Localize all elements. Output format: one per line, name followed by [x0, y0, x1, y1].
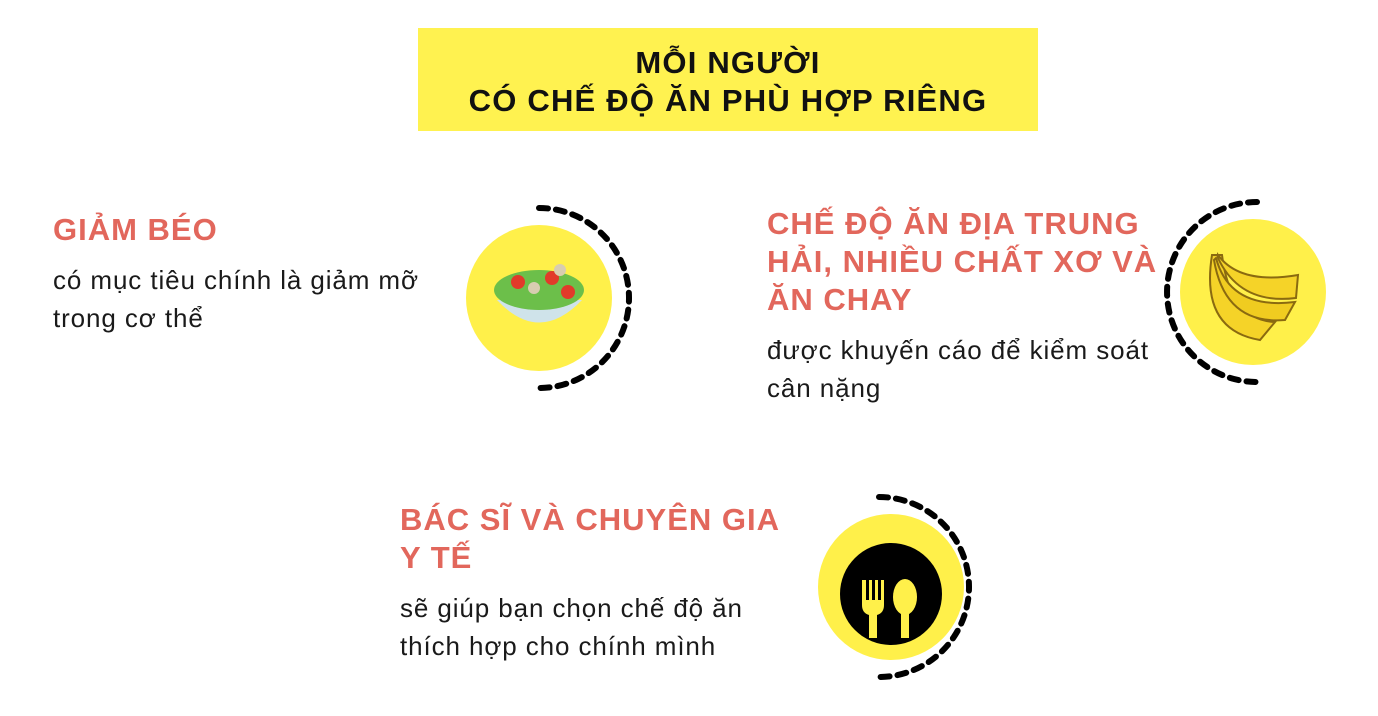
block: dia trung hai: cân nặng: [767, 373, 881, 403]
block: bac si: BÁC SĨ VÀ CHUYÊN GIA: [400, 502, 780, 537]
block: bac si: Y TẾ: [400, 540, 472, 575]
block: dia trung hai: CHẾ ĐỘ ĂN ĐỊA TRUNG: [767, 206, 1140, 241]
block: bac si: thích hợp cho chính mình: [400, 631, 716, 661]
block: dia trung hai: [767, 206, 1157, 403]
icon: fork and spoon: [818, 497, 969, 677]
block: giam beo: GIẢM BÉO: [53, 212, 218, 247]
icon: salad: [466, 208, 629, 388]
block: giam beo: có mục tiêu chính là giảm mỡ: [53, 265, 419, 295]
title box: [418, 28, 1038, 131]
block: bac si: sẽ giúp bạn chọn chế độ ăn: [400, 593, 743, 623]
block: giam beo: trong cơ thể: [53, 303, 204, 333]
block: dia trung hai: được khuyến cáo để kiểm soát: [767, 335, 1149, 365]
title box: MỖI NGƯỜI: [635, 45, 821, 80]
block: dia trung hai: ĂN CHAY: [767, 282, 912, 317]
icon: banana: [1167, 202, 1326, 382]
block: dia trung hai: HẢI, NHIỀU CHẤT XƠ VÀ: [767, 244, 1157, 279]
block: giam beo: [53, 212, 419, 333]
title box: CÓ CHẾ ĐỘ ĂN PHÙ HỢP RIÊNG: [469, 83, 987, 118]
block: bac si: [400, 502, 780, 661]
